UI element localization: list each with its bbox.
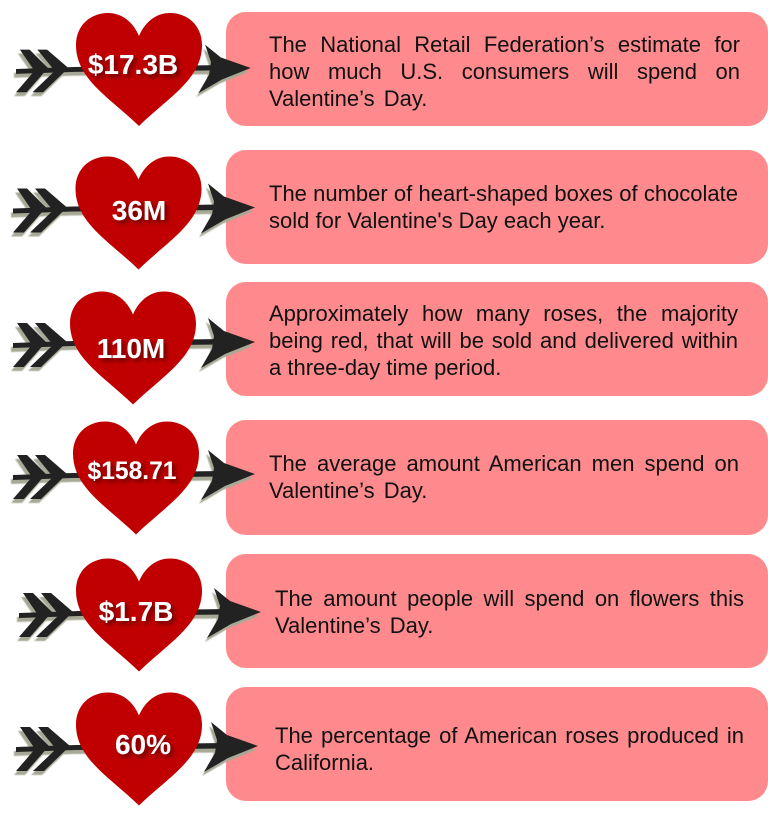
text: row 4 description: The average amount American men spend on [269, 451, 739, 476]
panel: row 1 spending estimate [226, 12, 768, 126]
icon: arrow 4 [11, 450, 255, 504]
text: row 6 description [275, 723, 744, 775]
number: 60%: 60% [115, 729, 171, 760]
icon: heart 6 [76, 692, 202, 806]
icon: arrow 2 [11, 184, 255, 238]
text: row 1 description: The National Retail Federation’s estimate for [269, 32, 740, 57]
text: row 5 description: The amount people will spend on flowers this [275, 586, 744, 611]
text: row 2 description: sold for Valentine's Day each year. [269, 208, 605, 233]
icon: arrow 1 [14, 45, 251, 97]
text: row 3 description: a three-day time period. [269, 355, 501, 380]
text: row 1 description: Valentine’s Day. [269, 86, 427, 111]
number: $158.71: $158.71 [88, 458, 176, 485]
text: row 3 description: Approximately how many roses, the majority [269, 301, 738, 326]
text: row 6 description: California. [275, 750, 374, 775]
icon: heart 2 [76, 156, 202, 270]
number: $17.3B: $17.3B [88, 49, 178, 80]
text: row 6 description: The percentage of American roses produced in [275, 723, 744, 748]
number: 110M: 110M [97, 333, 165, 364]
panel: row 6 California roses [226, 687, 768, 801]
text: row 1 description [269, 32, 740, 111]
text: row 5 description [275, 586, 744, 638]
panel: row 2 chocolate boxes [226, 150, 768, 264]
icon: arrow 6 [14, 722, 258, 776]
number: $1.7B: $1.7B [99, 596, 173, 627]
text: row 1 description: how much U.S. consumers will spend on [269, 59, 740, 84]
text: row 2 description [269, 181, 738, 233]
text: row 3 description: being red, that will be sold and delivered within [269, 328, 738, 353]
text: row 5 description: Valentine’s Day. [275, 613, 433, 638]
panel: row 3 roses [226, 282, 768, 396]
icon: heart 1 [76, 13, 202, 126]
text: row 2 description: The number of heart-shaped boxes of chocolate [269, 181, 738, 206]
icon: arrow 5 [17, 588, 261, 642]
icon: arrow 3 [11, 318, 255, 372]
icon: heart 5 [76, 558, 202, 672]
text: row 4 description [269, 451, 739, 503]
icon: heart 3 [70, 292, 196, 404]
panel: row 5 flowers [226, 554, 768, 668]
text: row 3 description [269, 301, 738, 380]
icon: heart 4 [73, 422, 199, 534]
number: 36M: 36M [112, 195, 166, 226]
panel: row 4 men's spending [226, 420, 768, 535]
text: row 4 description: Valentine’s Day. [269, 478, 427, 503]
